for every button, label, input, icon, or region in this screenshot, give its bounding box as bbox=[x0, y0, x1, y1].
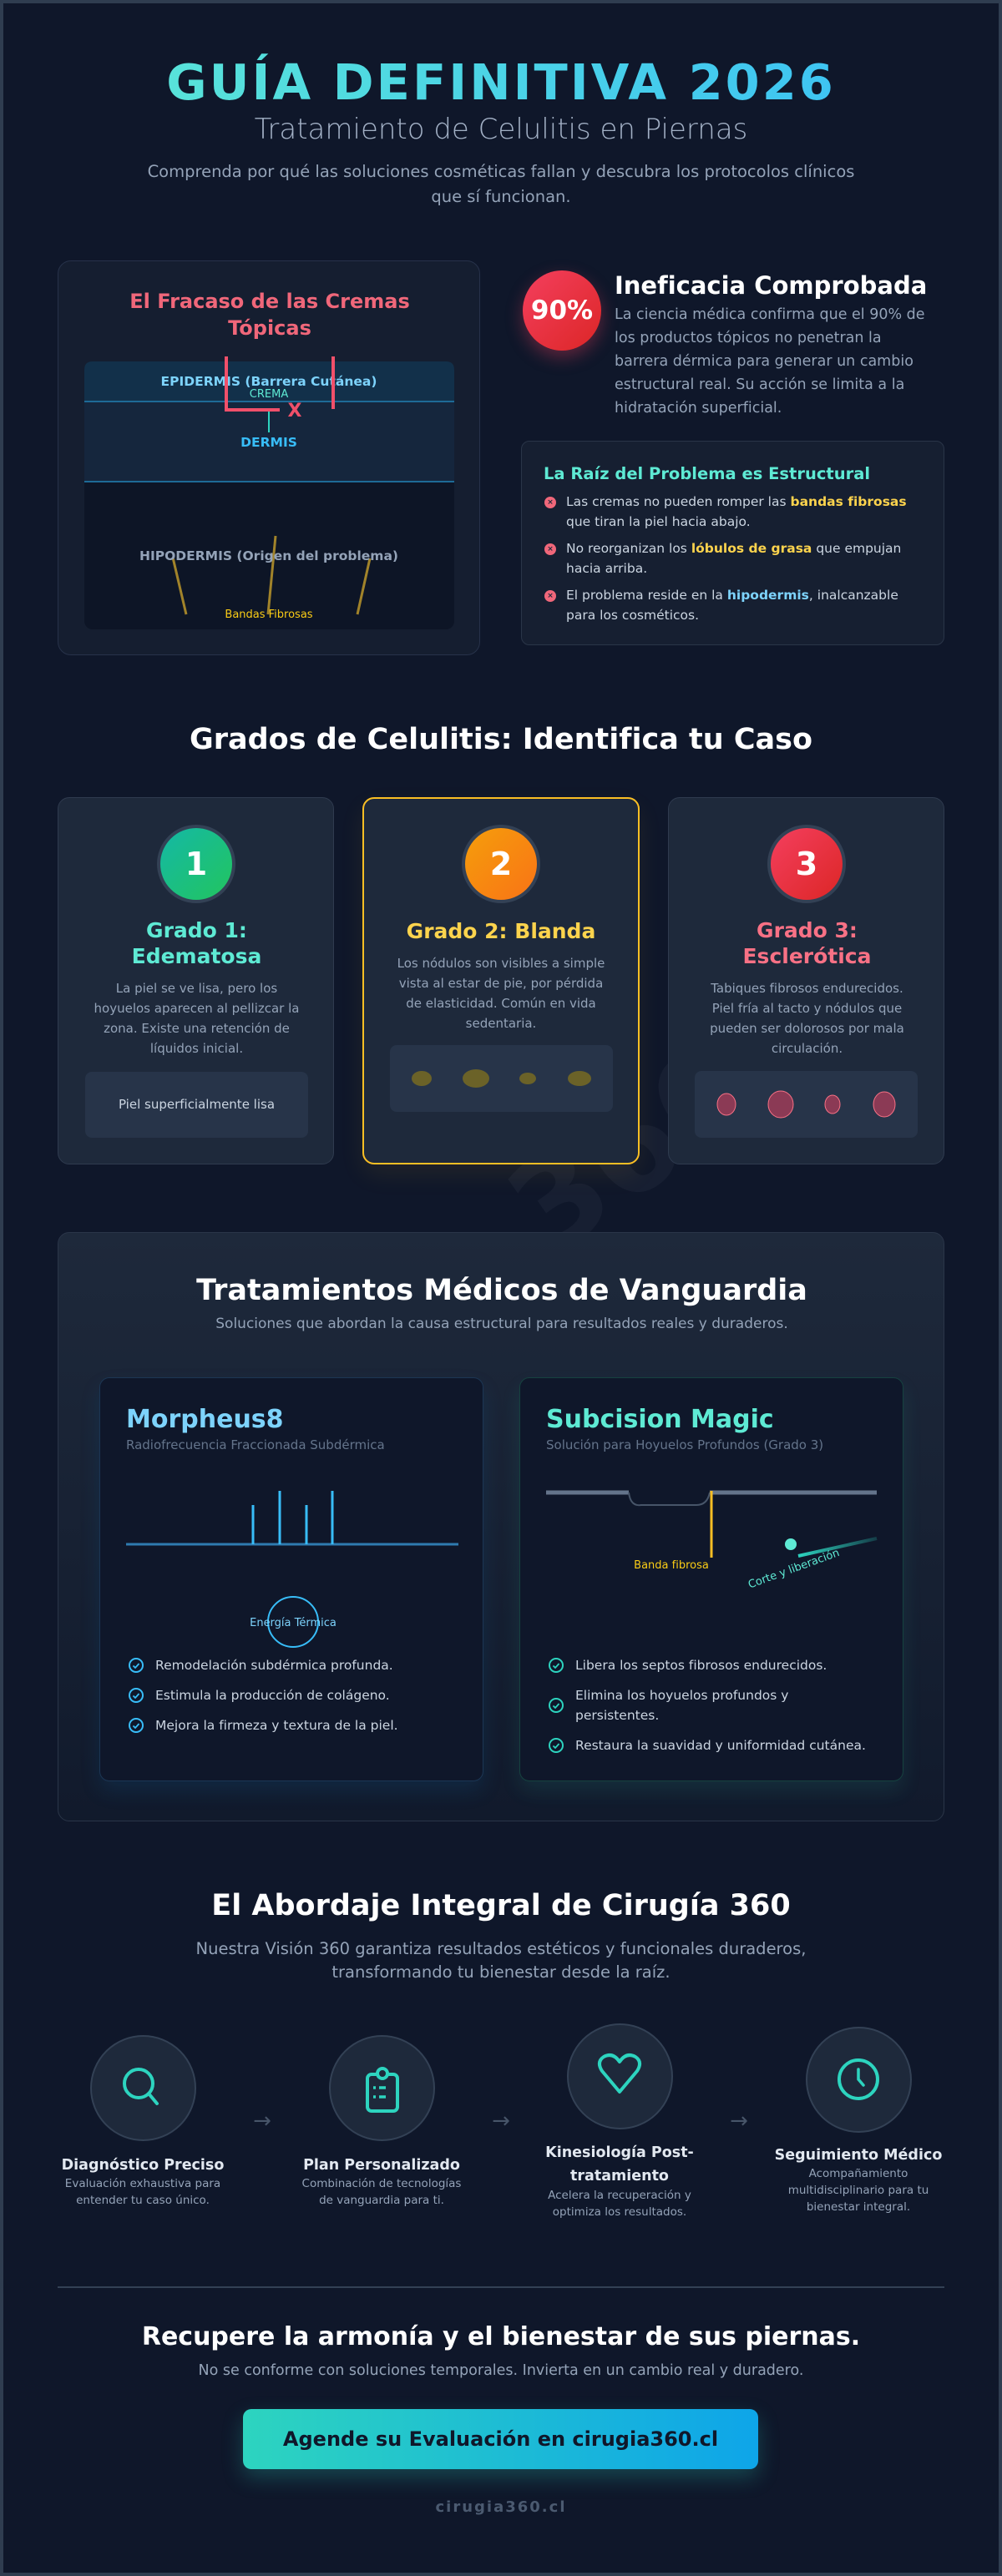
visual box bbox=[85, 1072, 308, 1138]
list: Las cremas no pueden romper las bandas fibrosas bbox=[566, 494, 907, 509]
step text: optimiza los resultados. bbox=[553, 2205, 686, 2219]
checklist: Remodelación subdérmica profunda. bbox=[155, 1658, 393, 1673]
heading: Tratamientos Médicos de Vanguardia bbox=[196, 1274, 807, 1307]
grade text: Los nódulos son visibles a simple vista al estar de pie, por pérdida de elasticidad. Común en vida sedentaria. bbox=[397, 956, 605, 1031]
intro text bbox=[148, 162, 854, 206]
skin layers diagram: Bandas Fibrosas bbox=[225, 609, 313, 621]
checklist: Restaura la suavidad y uniformidad cutánea. bbox=[575, 1738, 866, 1753]
icon: number 3 bbox=[767, 825, 846, 903]
step text bbox=[65, 2177, 220, 2207]
checklist: Libera los septos fibrosos endurecidos. bbox=[575, 1658, 827, 1673]
subheading: Soluciones que abordan la causa estructural para resultados reales y duraderos. bbox=[215, 1316, 788, 1332]
grade title bbox=[132, 918, 261, 968]
panel: grade 1 bbox=[58, 797, 334, 1164]
step: plan bbox=[302, 2035, 461, 2207]
icon: magnifier bbox=[90, 2035, 196, 2141]
step title: Diagnóstico Preciso bbox=[62, 2157, 224, 2174]
grade title: Grado 2: Blanda bbox=[407, 919, 595, 943]
arrow: → bbox=[730, 2109, 748, 2134]
visual box: Piel superficialmente lisa bbox=[119, 1097, 275, 1112]
nodules visual bbox=[695, 1071, 918, 1138]
step text bbox=[548, 2189, 691, 2219]
icon: heart bbox=[567, 2023, 673, 2129]
text: integral approach bbox=[196, 1939, 806, 1982]
RF chart: Energía Térmica bbox=[250, 1617, 337, 1629]
step text: entender tu caso único. bbox=[76, 2194, 210, 2207]
text: ineficacia: los productos tópicos no penetran la bbox=[615, 330, 882, 346]
panel: cream failure bbox=[58, 260, 480, 655]
list: que tiran la piel hacia abajo. bbox=[566, 514, 751, 529]
grade text: Tabiques fibrosos endurecidos. Piel fría al tacto y nódulos que pueden ser dolorosos por mala circulación. bbox=[710, 981, 904, 1056]
panel title: Tópicas bbox=[228, 316, 311, 340]
card: Subcision Magic bbox=[519, 1377, 903, 1781]
skin layers diagram: EPIDERMIS (Barrera Cutánea) bbox=[161, 374, 377, 389]
icon: number 2 bbox=[462, 825, 540, 903]
icon: number 1 bbox=[157, 825, 235, 903]
subcision diagram: Corte y liberación bbox=[746, 1547, 841, 1591]
step text bbox=[788, 2167, 929, 2214]
list: × bbox=[547, 545, 554, 553]
step text: Combinación de tecnologías bbox=[302, 2177, 461, 2190]
list: para los cosméticos. bbox=[566, 608, 699, 623]
step title: Plan Personalizado bbox=[303, 2157, 460, 2174]
icon: 90% badge bbox=[523, 270, 601, 351]
checklist: Estimula la producción de colágeno. bbox=[155, 1688, 390, 1703]
arrow: → bbox=[253, 2109, 271, 2134]
grade title bbox=[742, 918, 872, 968]
step text: de vanguardia para ti. bbox=[319, 2194, 444, 2207]
icon: clipboard bbox=[329, 2035, 435, 2141]
list: hacia arriba. bbox=[566, 561, 647, 576]
list: × bbox=[547, 498, 554, 507]
footer: cirugia360.cl bbox=[436, 2498, 566, 2516]
list: El problema reside en la hipodermis, inalcanzable bbox=[566, 588, 898, 603]
subcision diagram: Banda fibrosa bbox=[634, 1559, 709, 1572]
step text: multidisciplinario para tu bbox=[788, 2184, 929, 2197]
subtitle: Tratamiento de Celulitis en Piernas bbox=[255, 113, 747, 146]
card subtitle: Radiofrecuencia Fraccionada Subdérmica bbox=[126, 1437, 385, 1452]
list: × bbox=[547, 592, 554, 600]
text: ineficacia: estructural real. Su acción se limita a la bbox=[615, 376, 904, 393]
skin layers diagram: DERMIS bbox=[240, 435, 297, 450]
closing text: No se conforme con soluciones temporales. Invierta en un cambio real y duradero. bbox=[199, 2362, 803, 2379]
heading: ineficacia: Ineficacia Comprobada bbox=[615, 271, 927, 300]
icon: clock bbox=[806, 2027, 912, 2133]
skin layers diagram bbox=[84, 356, 454, 629]
skin layers diagram: CREMA bbox=[250, 388, 288, 401]
nodules visual bbox=[390, 1045, 613, 1112]
grade title: Grado 1: bbox=[146, 918, 247, 942]
title: GUÍA DEFINITIVA 2026 bbox=[166, 53, 836, 111]
step text: Acelera la recuperación y bbox=[548, 2189, 691, 2202]
checklist bbox=[129, 1658, 398, 1733]
list bbox=[544, 494, 907, 623]
step: diagnóstico bbox=[62, 2035, 224, 2207]
card title: Morpheus8 bbox=[126, 1405, 284, 1434]
list: No reorganizan los lóbulos de grasa que empujan bbox=[566, 541, 901, 556]
intro text: Comprenda por qué las soluciones cosméticas fallan y descubra los protocolos clínicos bbox=[148, 162, 854, 181]
card title: Subcision Magic bbox=[546, 1405, 774, 1434]
RF chart bbox=[126, 1491, 458, 1648]
grade title: Esclerótica bbox=[742, 944, 872, 968]
skin layers diagram: HIPODERMIS (Origen del problema) bbox=[139, 548, 398, 563]
text: ineficacia: La ciencia médica confirma que el 90% de bbox=[615, 306, 925, 323]
panel title: La Raíz del Problema es Estructural bbox=[544, 464, 870, 483]
card subtitle: Solución para Hoyuelos Profundos (Grado 3) bbox=[546, 1437, 823, 1452]
panel: grade 2 bbox=[362, 797, 640, 1164]
icon: number 2: 2 bbox=[490, 846, 512, 882]
title bbox=[0, 50, 1002, 115]
arrow: → bbox=[492, 2109, 510, 2134]
intro text: que sí funcionan. bbox=[431, 187, 571, 206]
step text bbox=[302, 2177, 461, 2207]
step title: Seguimiento Médico bbox=[775, 2147, 942, 2164]
step title: Kinesiología Post-tratamiento bbox=[545, 2144, 694, 2185]
text: integral approach: transformando tu bienestar desde la raíz. bbox=[331, 1962, 671, 1982]
icon: 90% badge: 90% bbox=[531, 295, 593, 326]
grade title: Edematosa bbox=[132, 944, 261, 968]
closing heading: Recupere la armonía y el bienestar de sus piernas. bbox=[142, 2322, 860, 2351]
checklist: Elimina los hoyuelos profundos y bbox=[575, 1688, 788, 1703]
checklist bbox=[549, 1658, 866, 1753]
text: integral approach: Nuestra Visión 360 garantiza resultados estéticos y funcionales duraderos, bbox=[196, 1939, 806, 1958]
step: kinesiología bbox=[545, 2023, 694, 2219]
panel title: El Fracaso de las Cremas bbox=[129, 290, 410, 313]
heading: grades: Grados de Celulitis: Identifica tu Caso bbox=[190, 723, 812, 756]
watermark: 360 bbox=[483, 1015, 781, 1284]
checklist: persistentes. bbox=[575, 1708, 659, 1723]
text: ineficacia: hidratación superficial. bbox=[615, 400, 782, 417]
text: ineficacia: barrera dérmica para generar un cambio bbox=[615, 353, 913, 370]
step text: Acompañamiento bbox=[809, 2167, 908, 2180]
panel: grade 3 bbox=[668, 797, 944, 1164]
CTA button: Agende su Evaluación en cirugia360.cl bbox=[283, 2427, 718, 2451]
step text: Evaluación exhaustiva para bbox=[65, 2177, 220, 2190]
CTA button bbox=[243, 2409, 758, 2469]
subcision diagram bbox=[546, 1491, 877, 1591]
panel: treatments bbox=[58, 1232, 944, 1821]
panel: structural root bbox=[521, 441, 944, 645]
card: Morpheus8 bbox=[99, 1377, 483, 1781]
step: seguimiento bbox=[775, 2027, 942, 2214]
icon: number 1: 1 bbox=[185, 846, 207, 882]
grade text: La piel se ve lisa, pero los hoyuelos aparecen al pellizcar la zona. Existe una retención de líquidos inicial. bbox=[94, 981, 299, 1056]
panel title bbox=[129, 290, 410, 340]
skin layers diagram: X bbox=[288, 401, 302, 422]
heading: integral approach: El Abordaje Integral de Cirugía 360 bbox=[211, 1889, 791, 1922]
text: ineficacia bbox=[615, 306, 925, 417]
checklist: Mejora la firmeza y textura de la piel. bbox=[155, 1718, 398, 1733]
grade title: Grado 3: bbox=[757, 918, 858, 942]
step text: bienestar integral. bbox=[807, 2200, 910, 2214]
icon: number 3: 3 bbox=[796, 846, 817, 882]
